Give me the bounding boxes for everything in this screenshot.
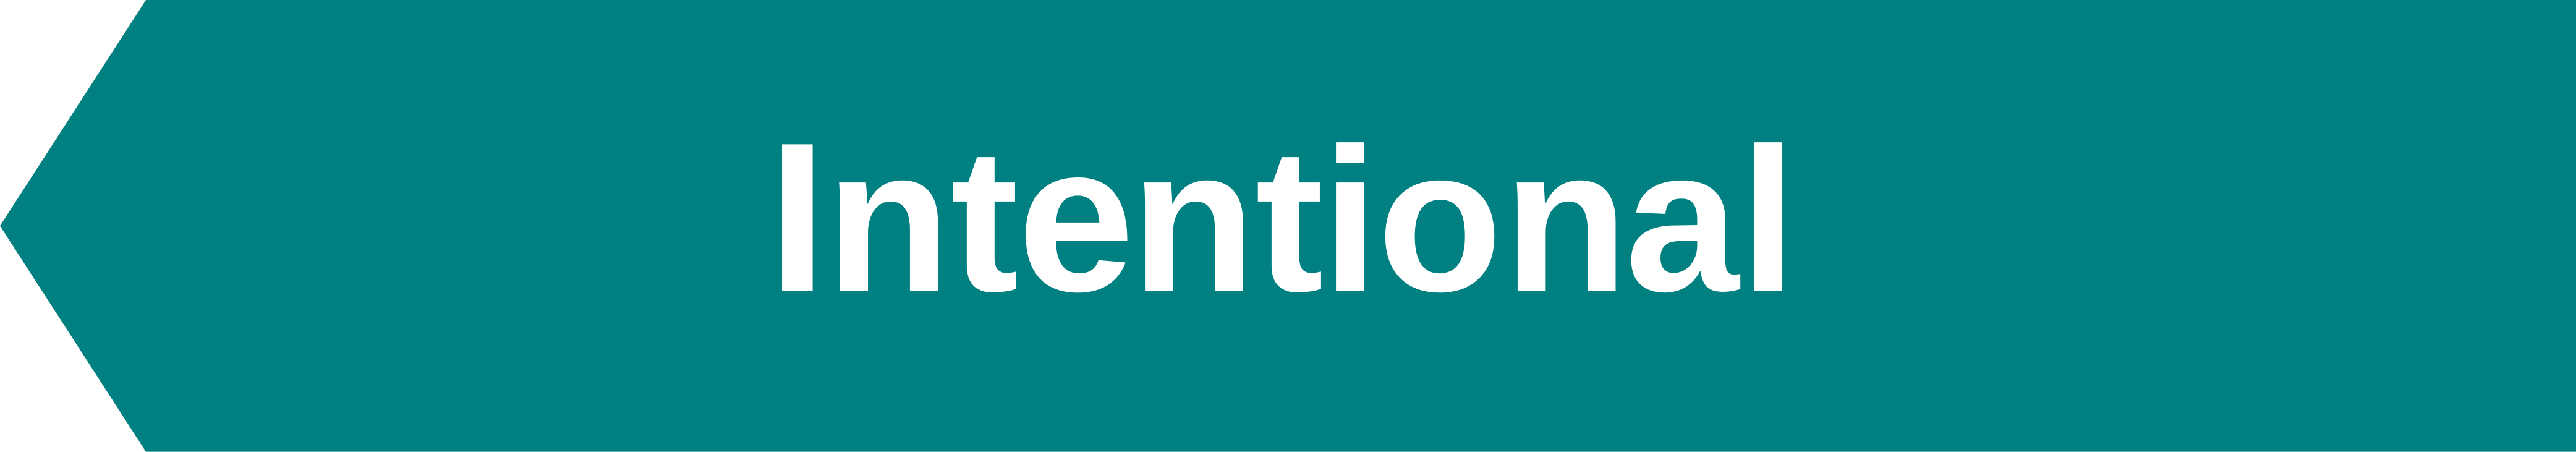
title: Intentional: I xyxy=(768,98,827,336)
title: Intentional: ntional xyxy=(1131,106,1796,335)
title: Intentional: e xyxy=(1018,101,1134,336)
title: Intentional: nt xyxy=(826,106,1019,335)
